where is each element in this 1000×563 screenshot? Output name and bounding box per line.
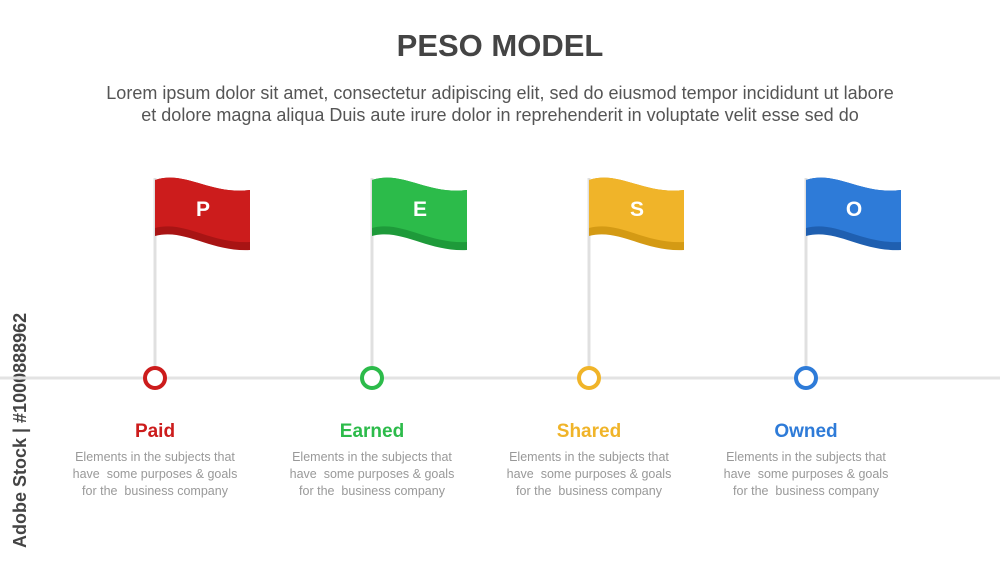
label: Owned: Owned: [774, 421, 838, 442]
subtitle text: [106, 83, 894, 125]
flag P: P: [196, 198, 210, 221]
label: Shared: have some purposes & goals: [507, 467, 671, 481]
label: Owned: for the business company: [733, 484, 879, 498]
flag S: [579, 178, 684, 388]
flag O: [796, 178, 901, 388]
label: Shared: Elements in the subjects that: [509, 450, 669, 464]
label: Owned: Elements in the subjects that: [726, 450, 886, 464]
label: Earned: for the business company: [299, 484, 445, 498]
label: Owned: have some purposes & goals: [724, 467, 888, 481]
label: Paid: have some purposes & goals: [73, 467, 237, 481]
label: Owned: [724, 421, 888, 498]
label: Paid: Elements in the subjects that: [75, 450, 235, 464]
label: Earned: Earned: [340, 421, 404, 442]
label: Earned: [290, 421, 454, 498]
label: Shared: [507, 421, 671, 498]
subtitle text: et dolore magna aliqua Duis aute irure dolor in reprehenderit in voluptate velit esse sed do: [141, 105, 859, 125]
flag O: O: [846, 198, 862, 221]
flag E: [362, 178, 467, 388]
label: Shared: for the business company: [516, 484, 662, 498]
label: Earned: have some purposes & goals: [290, 467, 454, 481]
title: PESO MODEL: [397, 28, 603, 63]
flag E: E: [413, 198, 427, 221]
label: Paid: Paid: [135, 421, 175, 442]
flag S: S: [630, 198, 644, 221]
subtitle text: Lorem ipsum dolor sit amet, consectetur adipiscing elit, sed do eiusmod tempor incididunt ut labore: [106, 83, 894, 103]
label: Paid: for the business company: [82, 484, 228, 498]
label: Paid: [73, 421, 237, 498]
label: Earned: Elements in the subjects that: [292, 450, 452, 464]
label: Shared: Shared: [557, 421, 621, 442]
watermark id: Adobe Stock | #1000888962: [10, 313, 30, 548]
flag P: [145, 178, 250, 388]
